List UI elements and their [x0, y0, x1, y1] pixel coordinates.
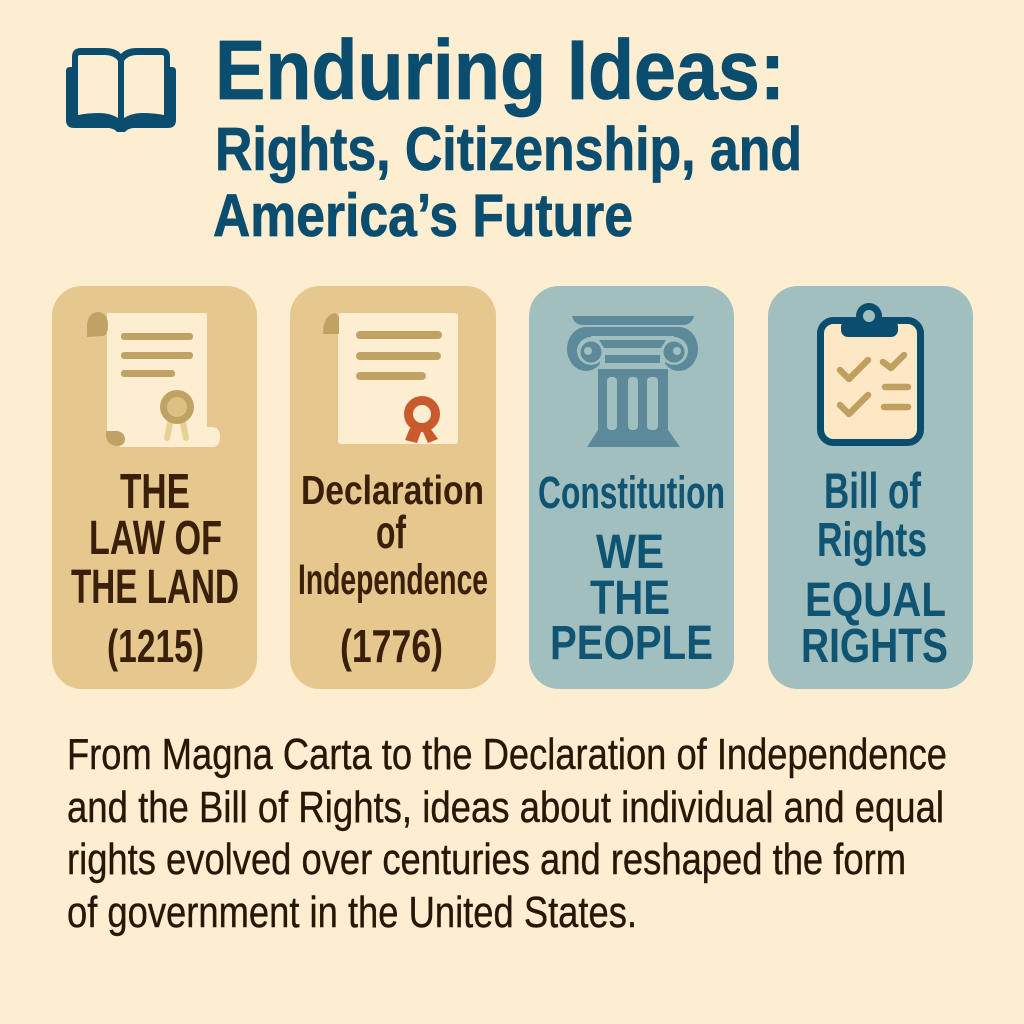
- card text: LAW OF: [89, 512, 222, 565]
- card text: (1776): [340, 620, 443, 672]
- card text: [538, 467, 725, 670]
- card text: WE: [596, 526, 664, 579]
- panel: constitution: [529, 286, 734, 689]
- icon: document with red seal: [323, 313, 458, 444]
- icon: ionic column: [567, 316, 698, 447]
- card text: of: [376, 506, 406, 558]
- card text: PEOPLE: [550, 617, 713, 670]
- card text: [298, 467, 488, 672]
- title: Rights, Citizenship, and: [215, 115, 802, 183]
- card text: (1215): [107, 620, 204, 672]
- card text: [801, 463, 948, 673]
- card text: Declaration: [301, 467, 484, 513]
- icon: clipboard checklist: [820, 303, 920, 442]
- card text: Independence: [298, 556, 488, 604]
- icon: open book: [66, 48, 176, 132]
- body paragraph: [67, 730, 947, 937]
- panel: bill of rights: [768, 286, 973, 689]
- card text: Bill of: [824, 463, 921, 519]
- title: [213, 23, 802, 249]
- title: Enduring Ideas:: [215, 23, 785, 117]
- card text: THE LAND: [71, 561, 239, 614]
- card text: EQUAL: [805, 574, 946, 627]
- card text: Rights: [817, 514, 927, 567]
- panel: declaration of independence: [290, 286, 496, 689]
- card text: Constitution: [538, 467, 725, 518]
- panel: the law of the land: [52, 286, 257, 689]
- icon: scroll with seal: [87, 312, 220, 447]
- card text: RIGHTS: [801, 620, 948, 673]
- card text: THE: [120, 465, 190, 519]
- body paragraph: of government in the United States.: [67, 888, 637, 937]
- title: America’s Future: [213, 182, 633, 249]
- card text: [71, 465, 239, 672]
- card text: THE: [590, 572, 670, 625]
